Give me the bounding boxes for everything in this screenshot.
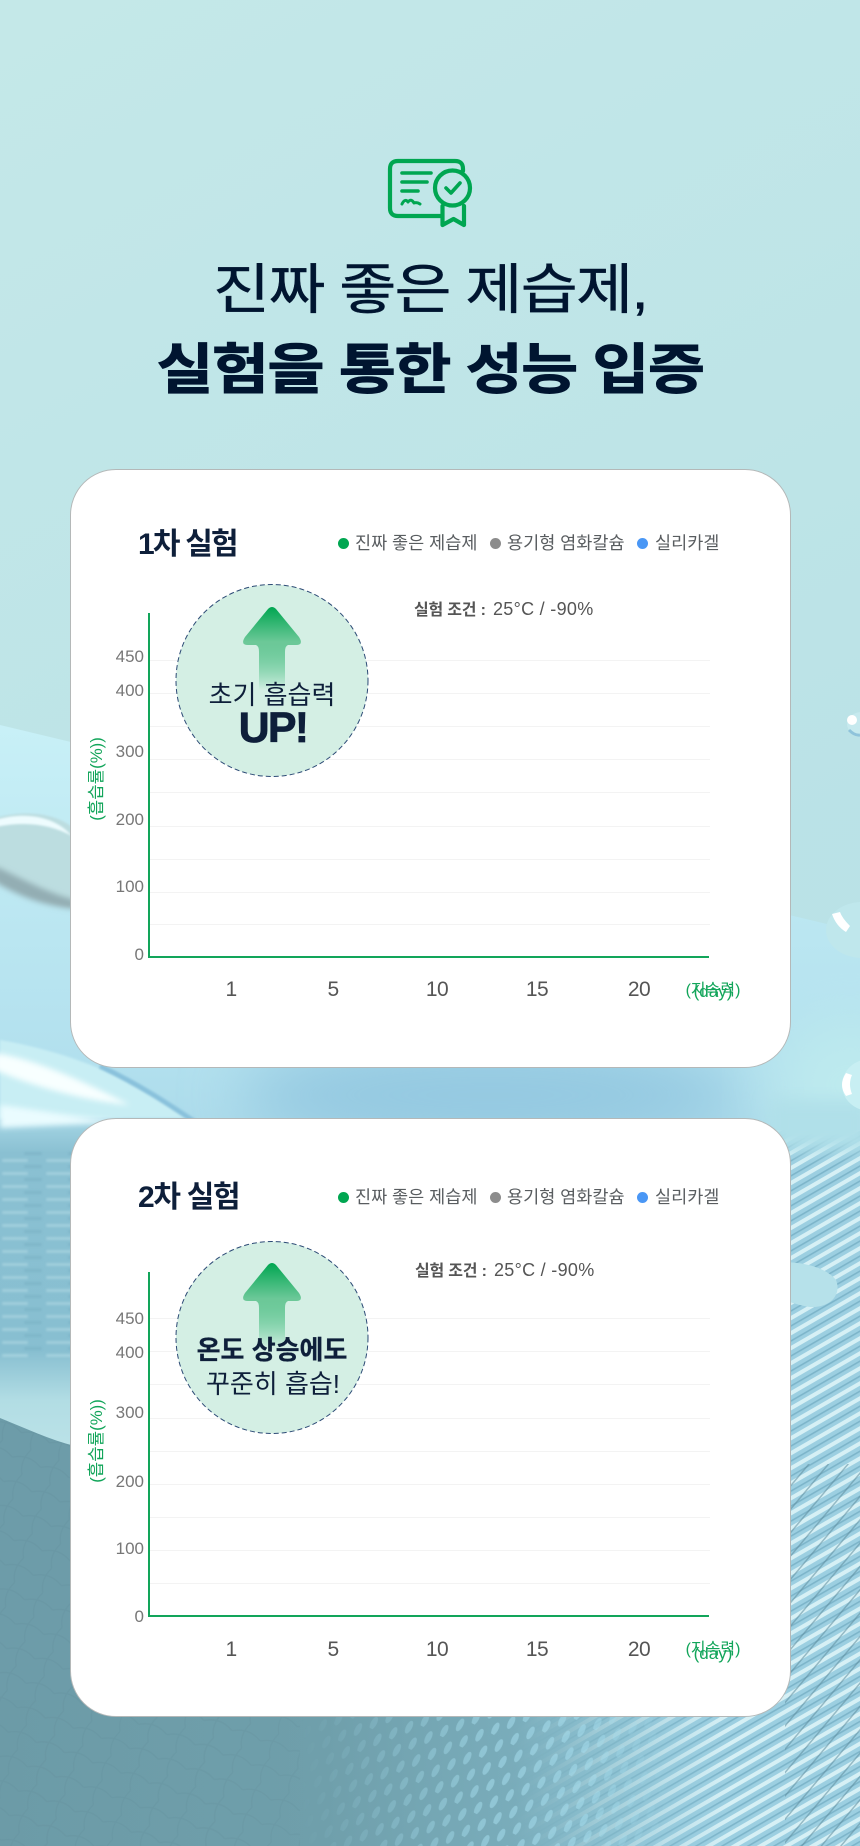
x axis labels bbox=[225, 1638, 650, 1661]
title line 2: 실험을 통한 성능 입증 bbox=[156, 340, 704, 401]
y axis labels: 400 bbox=[116, 681, 144, 700]
panel: 2nd experiment bbox=[70, 1118, 791, 1717]
x axis title: overlapping labels: (day) bbox=[694, 982, 732, 1001]
drops on right bbox=[847, 712, 860, 736]
callout text: 온도 상승에도: 온도 상승에도 bbox=[197, 1335, 347, 1365]
x axis labels: 20 bbox=[628, 978, 650, 1001]
x axis title: overlapping labels: (지속력) bbox=[686, 1641, 740, 1658]
y axis title: (흡습률(%)) bbox=[87, 737, 106, 821]
legend label: green: 진짜 좋은 제습제 bbox=[355, 1187, 477, 1207]
y axis labels: 0 bbox=[135, 1607, 144, 1626]
legend label: grey: 용기형 염화칼슘 bbox=[507, 533, 625, 553]
y axis labels: 300 bbox=[116, 1403, 144, 1422]
left column ripple area bbox=[0, 1120, 300, 1450]
x axis labels: 5 bbox=[327, 1638, 339, 1661]
grid lines and axes bbox=[148, 613, 710, 958]
left droplet bbox=[0, 813, 80, 908]
x axis labels: 15 bbox=[526, 978, 548, 1001]
callout text: 초기 흡습력: 초기 흡습력 bbox=[209, 680, 335, 710]
legend dot: blue bbox=[637, 1192, 648, 1203]
y axis title: (흡습률(%)) bbox=[87, 1399, 106, 1483]
x axis labels: 10 bbox=[426, 978, 448, 1001]
y axis labels: 200 bbox=[116, 1472, 144, 1491]
callout circle: initial absorption up bbox=[176, 584, 368, 777]
legend dot: grey bbox=[490, 1192, 501, 1203]
legend label: grey: 용기형 염화칼슘 bbox=[507, 1187, 625, 1207]
dark lower surface bbox=[0, 1418, 300, 1846]
test condition: 실험 조건 : 25°C / -90% bbox=[415, 1260, 594, 1280]
callout circle: steady absorption bbox=[176, 1241, 368, 1434]
x axis title: overlapping labels: (지속력) bbox=[686, 982, 740, 999]
legend label: blue: 실리카겔 bbox=[655, 1187, 719, 1207]
panel contents: 1st experiment chart bbox=[87, 528, 740, 1001]
panel: 1st experiment bbox=[70, 469, 791, 1068]
mid blue band bbox=[240, 1040, 740, 1150]
y axis labels: 450 bbox=[116, 647, 144, 666]
background: water surface photo bbox=[0, 715, 860, 1846]
leaf-shaped droplet right bbox=[770, 1262, 838, 1307]
x axis labels: 20 bbox=[628, 1638, 650, 1661]
title line 1: 진짜 좋은 제습제, bbox=[213, 260, 647, 321]
legend label: green: 진짜 좋은 제습제 bbox=[355, 533, 477, 553]
legend dot: grey bbox=[490, 538, 501, 549]
panel contents: 2nd experiment chart bbox=[87, 1181, 740, 1663]
grid lines and axes bbox=[148, 1272, 710, 1617]
legend dot: green bbox=[338, 1192, 349, 1203]
x axis labels: 1 bbox=[225, 1638, 237, 1661]
y axis labels bbox=[116, 647, 144, 964]
x axis labels: 10 bbox=[426, 1638, 448, 1661]
y axis labels: 100 bbox=[116, 877, 144, 896]
x axis labels: 15 bbox=[526, 1638, 548, 1661]
title bbox=[156, 260, 704, 401]
y axis labels: 300 bbox=[116, 742, 144, 761]
y axis labels: 100 bbox=[116, 1539, 144, 1558]
heading: 2차 실험: 2차 실험 bbox=[138, 1181, 239, 1214]
x axis labels: 5 bbox=[327, 978, 339, 1001]
test condition: 실험 조건 : 25°C / -90% bbox=[414, 599, 594, 619]
legend bbox=[338, 533, 719, 553]
y axis labels: 0 bbox=[135, 945, 144, 964]
callout text: 꾸준히 흡습!: 꾸준히 흡습! bbox=[206, 1369, 340, 1399]
heading: 1차 실험: 1차 실험 bbox=[138, 528, 237, 561]
y axis labels: 450 bbox=[116, 1309, 144, 1328]
y axis labels bbox=[116, 1309, 144, 1626]
big bubble on left bbox=[0, 1040, 190, 1118]
y axis labels: 200 bbox=[116, 810, 144, 829]
right stripes bbox=[558, 1142, 860, 1846]
x axis labels bbox=[225, 978, 650, 1001]
x axis labels: 1 bbox=[225, 978, 237, 1001]
legend label: blue: 실리카겔 bbox=[655, 533, 719, 553]
icon: certificate with check seal bbox=[388, 158, 472, 228]
y axis labels: 400 bbox=[116, 1343, 144, 1362]
x axis title: overlapping labels: (day) bbox=[694, 1644, 732, 1663]
legend dot: green bbox=[338, 538, 349, 549]
legend dot: blue bbox=[637, 538, 648, 549]
legend bbox=[338, 1187, 719, 1207]
callout text: UP!: UP! bbox=[239, 704, 307, 752]
